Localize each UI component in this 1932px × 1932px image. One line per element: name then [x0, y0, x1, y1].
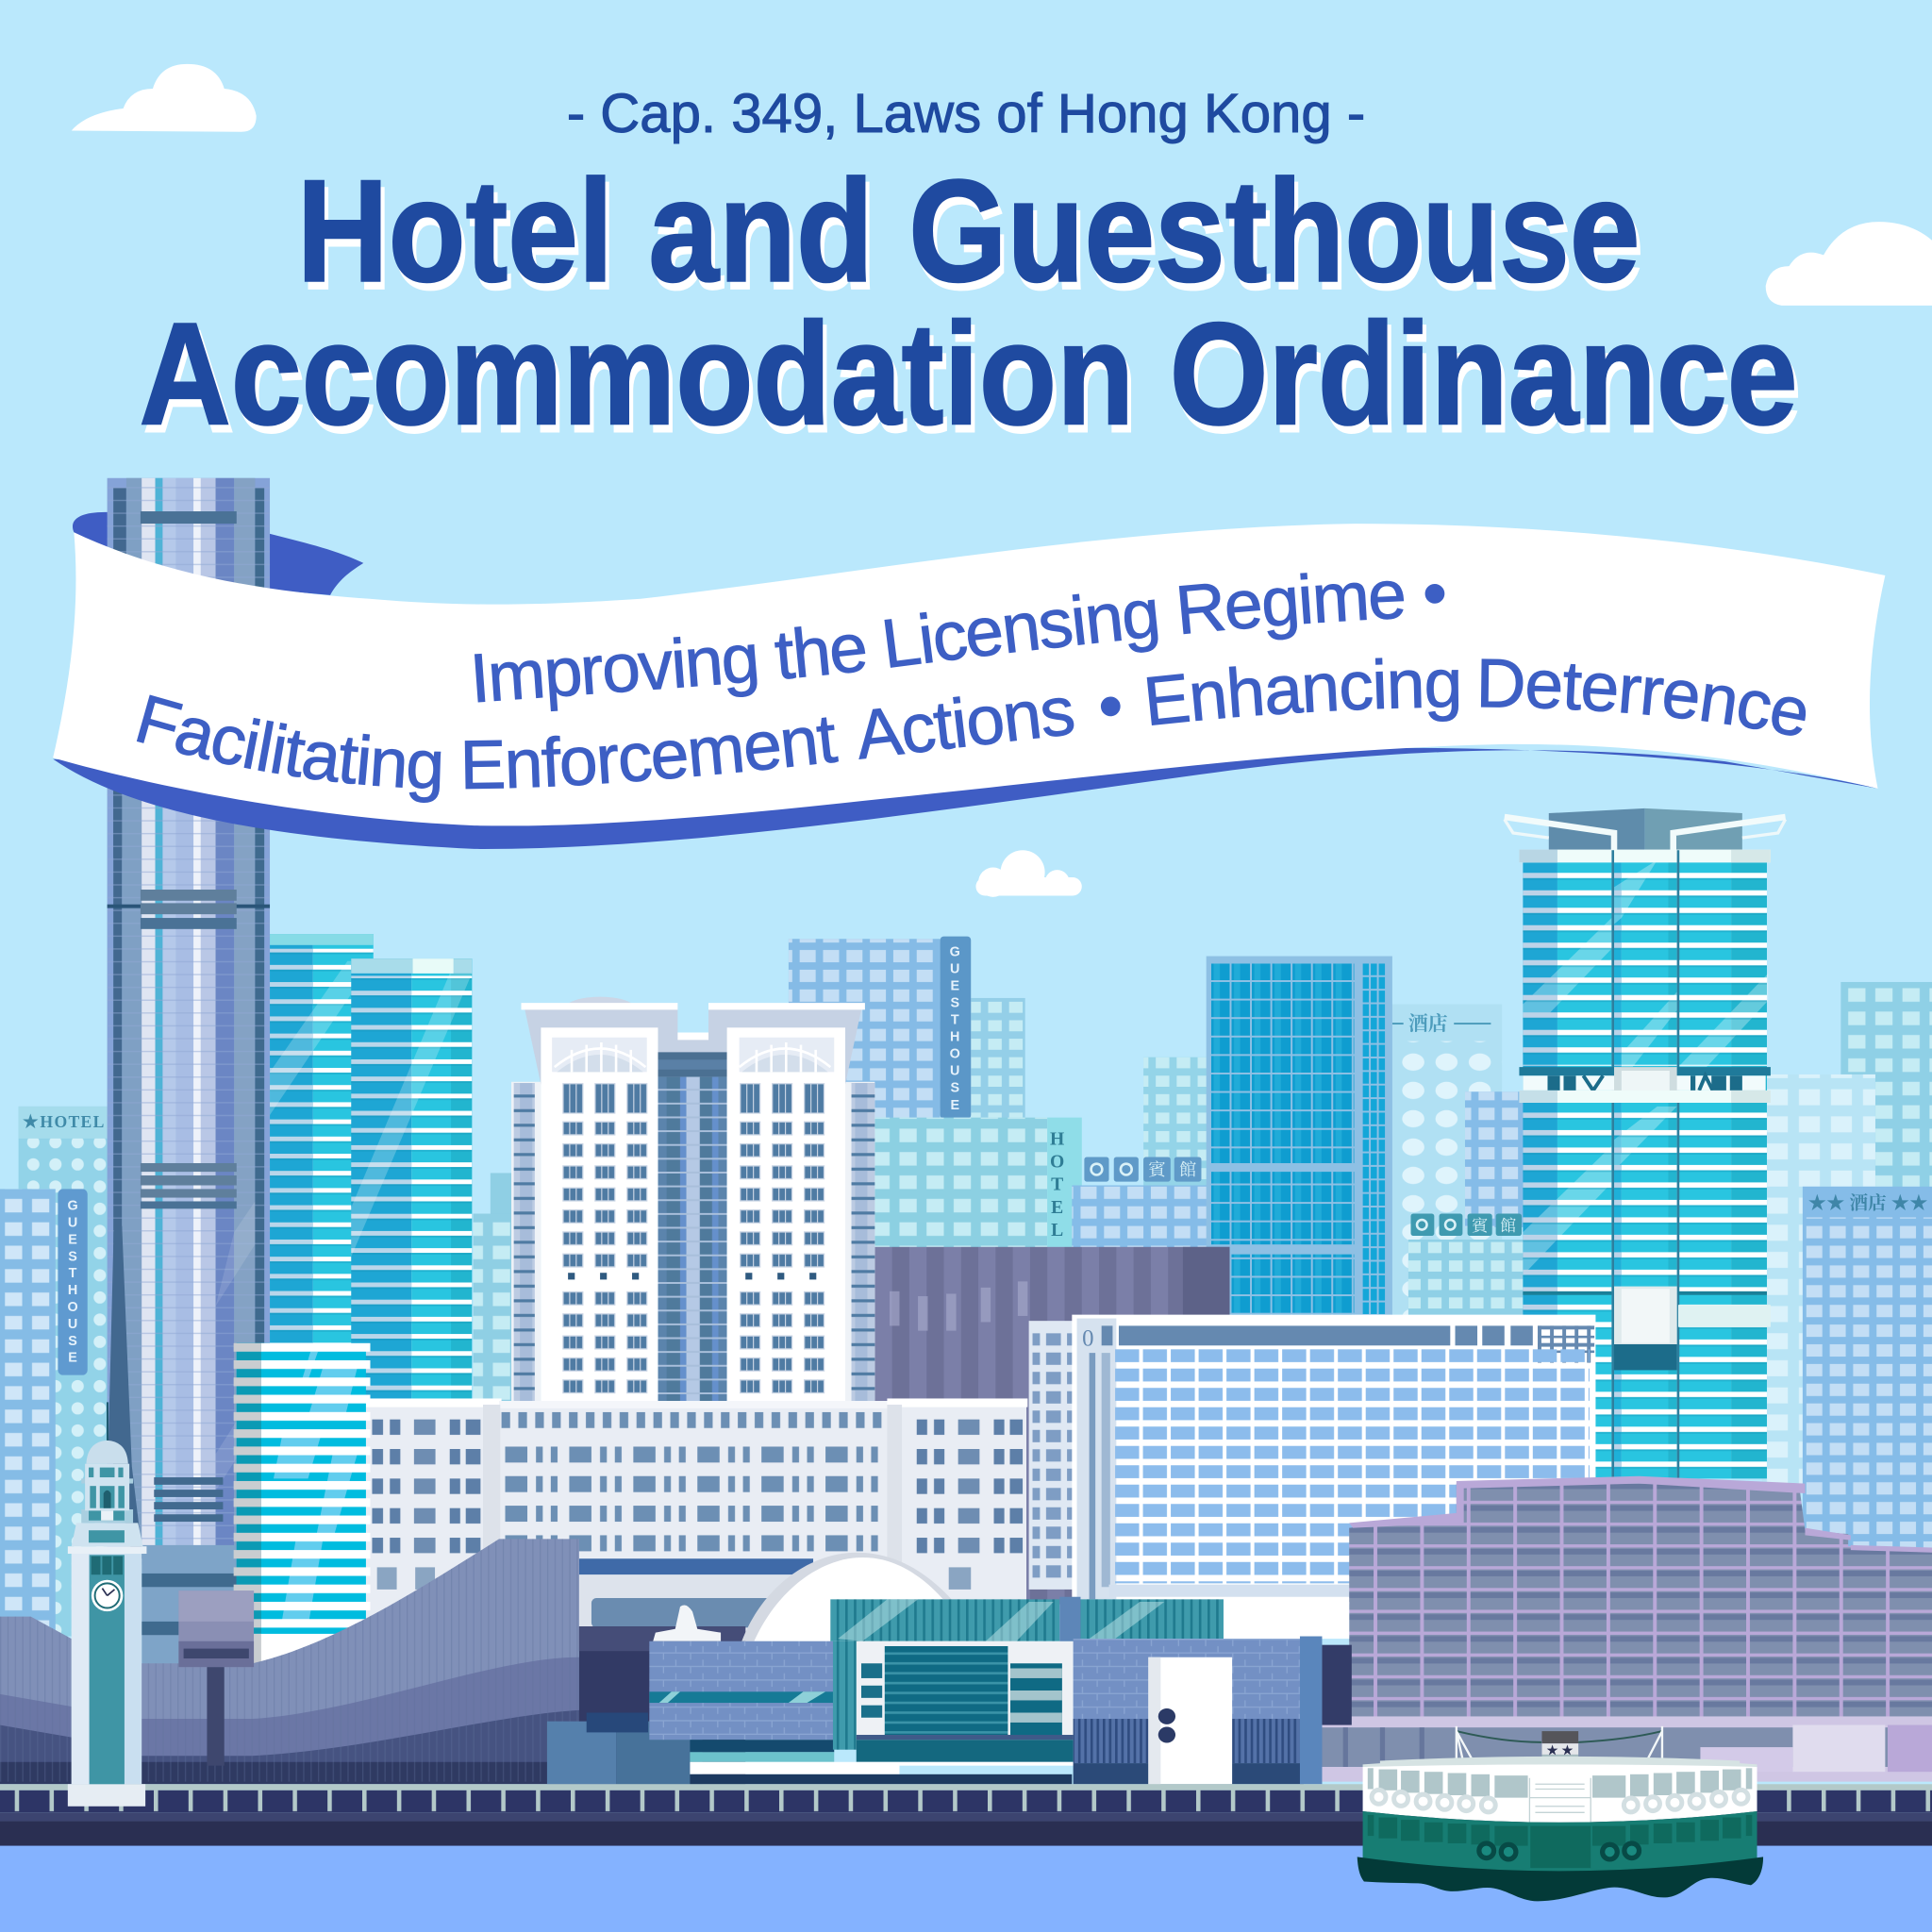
building: blue behind right tower: [1465, 1091, 1526, 1227]
sign: guesthouse left: T: [69, 1266, 77, 1281]
wings: [511, 1082, 874, 1402]
building: right cyan tower: [1505, 808, 1786, 1478]
cloud: top left: [72, 64, 257, 132]
building: hotel sign centre: T: [1051, 1175, 1063, 1195]
sign: guesthouse top: E: [950, 979, 959, 994]
pier railing: [0, 1784, 1932, 1847]
building: right pale: [1762, 1074, 1875, 1487]
sign: guesthouse left: [58, 1189, 88, 1375]
building: pale jiudian: 酒店: [1408, 1012, 1448, 1035]
sign: guesthouse top: [941, 937, 971, 1119]
building: cyan tower right: [351, 958, 472, 1402]
building: small teal: [1143, 1058, 1208, 1185]
museum teal building: [830, 1599, 1074, 1766]
cloud: centre: [975, 850, 1082, 897]
building: hotel sign centre: E: [1051, 1198, 1063, 1218]
building: dark purple block: [874, 1247, 1230, 1605]
title: Hotel and Guesthouse: [301, 157, 1643, 320]
ferry masts and funnel: [1457, 1726, 1662, 1766]
museum wing brick: [649, 1641, 1072, 1784]
building: hotel sign centre: [862, 1118, 1082, 1253]
sign: guesthouse top: G: [950, 945, 960, 960]
tower mid band: [1519, 1067, 1771, 1103]
space museum dome: [741, 1553, 974, 1641]
building: hotel sign centre: H: [1050, 1129, 1064, 1149]
building: teal with binguan sign: [1408, 1214, 1525, 1319]
banner text line 1: Improving the Licensing Regime •: [475, 573, 1445, 711]
background buildings: [0, 937, 1932, 1637]
sign: guesthouse left: E: [68, 1232, 77, 1247]
ferry dark waterline: [1357, 1857, 1763, 1901]
sign: guesthouse left: S: [68, 1334, 77, 1349]
sign: guesthouse top: E: [950, 1098, 959, 1113]
tower lower band: [1523, 1287, 1771, 1370]
sign: guesthouse left: H: [68, 1283, 77, 1298]
building: left blue: [0, 1189, 56, 1633]
sign: guesthouse left: S: [68, 1249, 77, 1264]
sign: guesthouse top: O: [950, 1047, 960, 1062]
fountain sculpture: [653, 1605, 721, 1641]
banner lower fold: [53, 748, 1878, 849]
sign: guesthouse left: U: [68, 1317, 77, 1332]
tall tower: ICC: [107, 478, 270, 1565]
low block behind clock tower: [142, 1545, 241, 1668]
crown: [521, 997, 865, 1084]
sign: binguan centre: 賓: [1148, 1160, 1167, 1179]
banner text line 2: Facilitating Enforcement Actions • Enhancing Deterrence: [136, 658, 1806, 803]
tower roof: [1505, 808, 1786, 850]
sign: guesthouse top: T: [951, 1013, 959, 1028]
building: hotel sign centre: L: [1051, 1221, 1063, 1241]
building: pale jiudian: [1391, 1004, 1502, 1324]
cloud: top right: [1766, 222, 1932, 306]
white door block: [1148, 1657, 1232, 1784]
building: mandarin hotel: [1029, 1315, 1595, 1605]
building: hotel sign centre: O: [1050, 1153, 1064, 1173]
building: harbour purple: [1309, 1476, 1932, 1782]
sign: guesthouse top: U: [950, 1064, 959, 1079]
east podium brick: [1059, 1597, 1352, 1784]
title: [140, 149, 1802, 462]
building: mandarin hotel: 0: [1082, 1325, 1094, 1351]
central dark blocks: [547, 1626, 745, 1784]
building: cyan tower left: [270, 934, 374, 1408]
sign: binguan centre: [1084, 1157, 1201, 1182]
ferry green hull: [1363, 1811, 1757, 1872]
banner back fold: [73, 512, 363, 595]
ferry masts and funnel: ★ ★: [1546, 1743, 1574, 1757]
building: white twin tower: [511, 997, 874, 1405]
banner front: [53, 524, 1885, 849]
building: teal with binguan sign: 賓: [1472, 1217, 1489, 1235]
subtitle: - Cap. 349, Laws of Hong Kong -: [567, 83, 1365, 144]
star ferry: [1357, 1726, 1763, 1901]
building: low teal behind white tower: [474, 1173, 515, 1401]
title: Hotel and Guesthouse: [297, 149, 1640, 312]
sign: guesthouse left: U: [68, 1216, 77, 1231]
building: peninsula low block: [359, 1398, 1027, 1647]
harbour podium: [1309, 1716, 1932, 1782]
building: teal with binguan sign: 館: [1500, 1217, 1516, 1235]
sign: guesthouse left: G: [67, 1199, 78, 1214]
sign: guesthouse top: H: [950, 1030, 959, 1045]
building: glass tower: [1207, 957, 1392, 1320]
sign: guesthouse top: U: [950, 962, 959, 977]
building: hotel sign left: ★HOTEL: [23, 1112, 106, 1131]
building: front cyan striped: [234, 1343, 370, 1671]
building: right teal back: [1840, 982, 1932, 1191]
building: binguan centre: [1072, 1185, 1208, 1249]
building: right jiudian: [1803, 1187, 1932, 1550]
building: hotel sign left: [19, 1107, 111, 1637]
sign: guesthouse top: S: [950, 996, 959, 1011]
building: right jiudian: ★★ 酒店 ★★: [1807, 1192, 1928, 1213]
sign: guesthouse left: O: [67, 1300, 78, 1315]
building: guesthouse tall back: [789, 939, 1025, 1119]
ferry upper deck: [1363, 1757, 1757, 1823]
banner ribbon: [53, 524, 1885, 825]
clock tower: [68, 1441, 146, 1807]
sign: guesthouse left: E: [68, 1351, 77, 1366]
sign: binguan centre: 館: [1179, 1160, 1196, 1179]
kiosk block: [178, 1591, 254, 1766]
sign: guesthouse top: S: [950, 1081, 959, 1096]
cultural centre curved roof: [0, 1539, 579, 1784]
water: [0, 1846, 1932, 1932]
